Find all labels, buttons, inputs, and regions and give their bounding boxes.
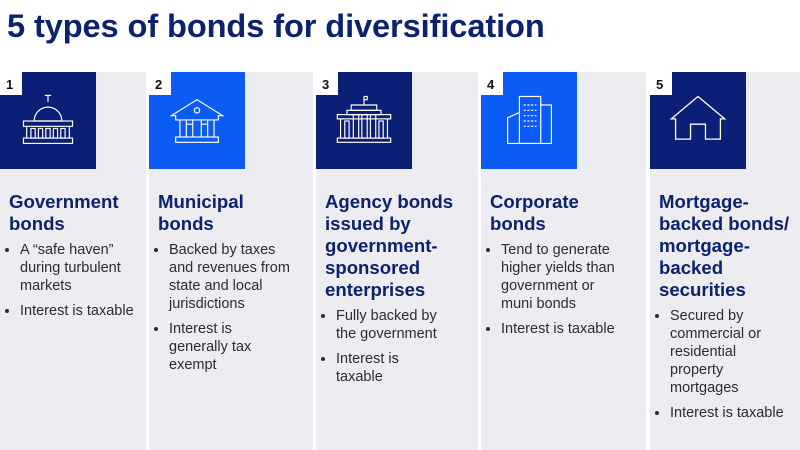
text: municipal: exempt [169, 357, 217, 373]
text: mortgage [655, 191, 789, 421]
text: government [5, 191, 134, 319]
text: mortgage: property [670, 362, 723, 378]
text: corporate [486, 191, 615, 337]
text: agency [321, 191, 453, 385]
title: 5 types of bonds for diversification [7, 7, 545, 44]
text: government: during turbulent [20, 260, 121, 276]
icon: government building: 3 [322, 77, 329, 92]
panel: corporate bonds [481, 72, 646, 450]
text: municipal: Backed by taxes [169, 242, 275, 258]
panel: municipal bonds [149, 72, 313, 450]
text: government: A “safe haven” [20, 242, 114, 258]
text: agency: the government [336, 326, 437, 342]
text: agency: issued by [325, 213, 411, 234]
text: mortgage: mortgages [670, 380, 739, 396]
text: municipal: state and local [169, 278, 263, 294]
text: corporate: higher yields than [501, 260, 615, 276]
text: corporate: bonds [490, 213, 546, 234]
icon: house [650, 72, 746, 169]
icon: bank: 2 [155, 77, 162, 92]
icon: capitol [0, 72, 96, 169]
text: mortgage: commercial or [670, 326, 761, 342]
text: municipal: bonds [158, 213, 214, 234]
text: agency: sponsored [325, 257, 420, 278]
text: agency: Interest is [336, 351, 399, 367]
text: mortgage: Mortgage- [659, 191, 749, 212]
panel: agency bonds [316, 72, 478, 450]
icon: government building [316, 72, 412, 169]
text: municipal: generally tax [169, 339, 251, 355]
text: municipal: jurisdictions [169, 296, 245, 312]
text: agency: Fully backed by [336, 308, 437, 324]
icon: house: 5 [656, 77, 663, 92]
text: corporate: Tend to generate [501, 242, 610, 258]
text: corporate: government or [501, 278, 594, 294]
text: mortgage: backed [659, 257, 723, 278]
text: government: markets [20, 278, 72, 294]
text: agency: enterprises [325, 279, 425, 300]
text: municipal: Municipal [158, 191, 244, 212]
icon: office tower: 4 [487, 77, 494, 92]
panel: government bonds [0, 72, 146, 450]
text: mortgage: Secured by [670, 308, 743, 324]
text: government: Interest is taxable [20, 303, 134, 319]
text: mortgage: residential [670, 344, 736, 360]
text: agency: government- [325, 235, 438, 256]
text: government: Government [9, 191, 119, 212]
text: corporate: Interest is taxable [501, 321, 615, 337]
icon: office tower [481, 72, 577, 169]
text: municipal: Interest is [169, 321, 232, 337]
panel: mortgage-backed [650, 72, 800, 450]
text: mortgage: mortgage- [659, 235, 750, 256]
text: mortgage: Interest is taxable [670, 405, 784, 421]
text: corporate: muni bonds [501, 296, 576, 312]
text: municipal: and revenues from [169, 260, 290, 276]
text: mortgage: securities [659, 279, 746, 300]
text: agency: Agency bonds [325, 191, 453, 212]
text: agency: taxable [336, 369, 383, 385]
icon: bank [149, 72, 245, 169]
text: municipal [154, 191, 290, 373]
text: mortgage: backed bonds/ [659, 213, 789, 234]
text: corporate: Corporate [490, 191, 579, 212]
icon: capitol: 1 [6, 77, 13, 92]
text: government: bonds [9, 213, 65, 234]
